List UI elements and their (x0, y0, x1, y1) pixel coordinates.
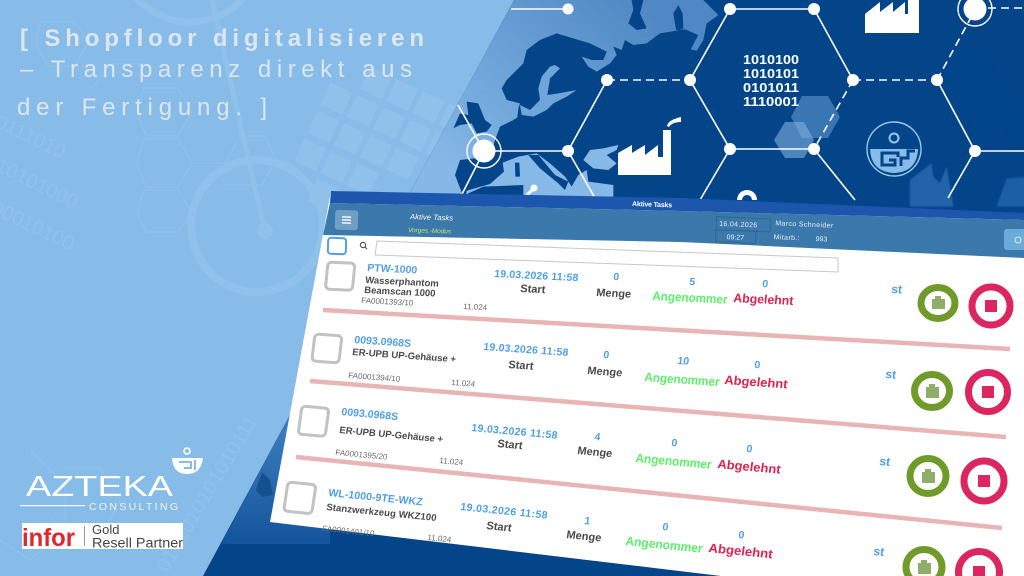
search row (328, 238, 838, 272)
row 1: Angenommer (652, 289, 728, 307)
row 1 (325, 262, 1010, 325)
row 1: Menge (596, 287, 632, 301)
logo: Azteka Consulting: AZTEKA (26, 471, 174, 503)
North Africa (468, 185, 523, 200)
row 1: Beamscan 1000 (364, 285, 436, 300)
row 4: st (873, 544, 885, 559)
icon: gear (737, 190, 757, 200)
row 1: 11.024 (463, 302, 488, 312)
row 2: Start (508, 359, 534, 373)
row 3: 19.03.2026 11:58 (471, 422, 558, 442)
icon: factory (618, 117, 681, 175)
row 2: FA0001394/10 (348, 371, 401, 384)
row 3: 0093.0968S (341, 406, 399, 423)
Novaya Zemlya (628, 0, 647, 30)
power button (1004, 229, 1024, 250)
date and user: 09:27 (726, 234, 744, 242)
date and user: Mitarb.: (774, 234, 800, 242)
row 1: Wasserphantom (365, 275, 439, 290)
row 4: Stanzwerkzeug WKZ100 (326, 502, 437, 524)
row 2: ER-UPB UP-Gehäuse + (352, 347, 457, 365)
row 4: Abgelehnt (708, 541, 774, 561)
Baltic Sea (520, 65, 577, 117)
row 2 (312, 334, 1008, 412)
row 2: 11.024 (451, 378, 476, 389)
map: Europe and Asia land (453, 0, 1020, 227)
faint binary text (0, 111, 262, 576)
row 4: FA0001401/10 (322, 524, 375, 538)
title (17, 25, 424, 121)
row 4: 11.024 (427, 533, 452, 544)
panel: tablet screen (270, 191, 1024, 576)
translucent hexagons (774, 96, 840, 158)
logo: infor Gold Resell Partner: infor (22, 524, 75, 552)
row 2: Angenommer (644, 370, 720, 389)
row 4: 1 (584, 515, 591, 528)
row 2: Menge (587, 365, 623, 379)
row 1: Start (520, 283, 546, 296)
row 3: Abgelehnt (717, 457, 782, 477)
row 3: Menge (577, 445, 613, 460)
faint square pattern (281, 55, 471, 248)
row 4: 19.03.2026 11:58 (460, 501, 548, 522)
mainland (455, 0, 1020, 227)
date and user: Marco Schneider (775, 220, 834, 230)
lower blue glow (221, 340, 330, 544)
logo: Azteka Consulting: CONSULTING (89, 501, 178, 513)
faint circuit pattern (0, 0, 323, 560)
row 1: PTW-1000 (367, 262, 418, 276)
header text (408, 212, 453, 236)
row 4 (284, 482, 999, 576)
menu button (335, 210, 358, 230)
binary code: 1010100 (743, 53, 799, 67)
row 3: Start (497, 438, 524, 452)
binary code: 1110001 (743, 95, 799, 109)
date and user: 993 (815, 236, 828, 244)
header bar (323, 203, 1024, 258)
top band (330, 191, 1024, 220)
row 2: st (885, 367, 897, 382)
row 2: 0 (603, 349, 610, 361)
icon: Azteka emblem (867, 122, 921, 176)
Mediterranean Sea (465, 153, 613, 207)
row 1: 0 (762, 278, 769, 290)
logo: Azteka Consulting (20, 448, 203, 513)
row 3: 4 (594, 431, 601, 444)
row 4: 0 (738, 529, 745, 542)
British Isles (453, 102, 492, 133)
Black Sea (583, 145, 618, 170)
title: [ Shopfloor digitalisieren (20, 25, 424, 52)
row 1: FA0001393/10 (361, 296, 414, 308)
row 1: st (891, 282, 903, 297)
Sardinia and Corsica (515, 163, 520, 177)
row 2: Abgelehnt (724, 373, 789, 391)
row 3: FA0001395/20 (335, 448, 388, 462)
title: – Transparenz direkt aus (20, 56, 412, 83)
row 4: Angenommer (625, 534, 704, 556)
top band title: Aktive Tasks (632, 201, 672, 209)
logo: infor Gold Resell Partner (22, 522, 184, 552)
divider lines (296, 310, 1010, 528)
row 1: 0 (613, 271, 620, 283)
row 3: 11.024 (439, 456, 464, 467)
row 1: 5 (689, 276, 696, 288)
row 3: 0 (671, 437, 678, 450)
title: der Fertigung. ] (17, 94, 267, 121)
row 2: 19.03.2026 11:58 (483, 341, 569, 359)
row 3: 0 (746, 443, 753, 456)
network nodes (467, 0, 992, 196)
network lines (458, 8, 1024, 200)
row 3 (298, 406, 1004, 501)
date and user: 16.04.2026 (719, 221, 757, 229)
map: East Asia (910, 47, 1024, 207)
row 1: 19.03.2026 11:58 (494, 268, 579, 284)
row 2: 10 (677, 355, 690, 368)
row 2: 0 (754, 359, 761, 371)
row 3: Angenommer (635, 451, 713, 472)
header text: Vorges.-Modus (408, 227, 452, 236)
binary code: 1010101 (743, 67, 799, 81)
row 4: Start (486, 520, 513, 535)
row 4: WL-1000-9TE-WKZ (328, 487, 424, 508)
faint binary text: 0101010101010111 (152, 411, 262, 576)
row 3: st (879, 454, 891, 469)
row 2: 0093.0968S (354, 334, 412, 350)
row 4: 0 (662, 521, 669, 534)
row 4: Menge (566, 529, 602, 544)
icon: factory top right (865, 0, 919, 33)
row 1: Abgelehnt (733, 291, 795, 308)
logo: infor Gold Resell Partner: Resell Partner (92, 536, 184, 550)
binary code (743, 53, 799, 109)
header text: Aktive Tasks (409, 212, 453, 223)
row 3: ER-UPB UP-Gehäuse + (339, 425, 444, 445)
date and user (715, 217, 834, 247)
Italy (528, 155, 568, 190)
binary code: 0101011 (743, 81, 799, 95)
logo: infor Gold Resell Partner: Gold (92, 522, 119, 537)
